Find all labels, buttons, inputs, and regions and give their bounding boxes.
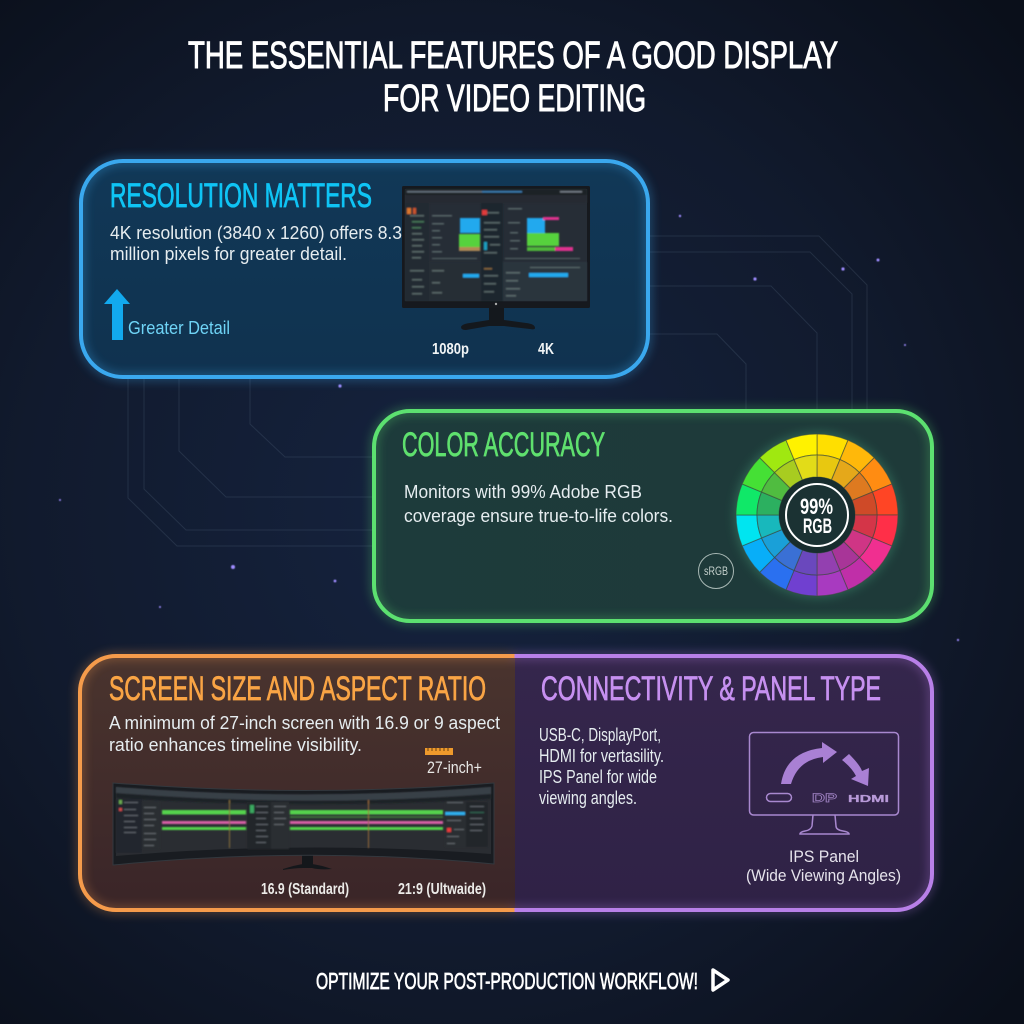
- chart: color wheel: [730, 428, 904, 602]
- monitor: 4K editing screen: [402, 186, 590, 330]
- icon: DP port: DP: [812, 791, 837, 805]
- label: 16:9 standard: 16.9 (Standard): [261, 881, 349, 898]
- label: 4K: 4K: [538, 341, 554, 358]
- label: IPS panel: [746, 847, 901, 885]
- title: FOR VIDEO EDITING: [383, 78, 646, 120]
- text: connectivity description: viewing angles.: [539, 788, 637, 808]
- label: IPS panel: IPS Panel: [789, 847, 859, 866]
- text: color description: coverage ensure true-to-life colors.: [404, 506, 673, 526]
- icon: monitor with ports: [750, 732, 898, 834]
- panel: resolution matters: [81, 161, 648, 377]
- icon: sRGB badge: sRGB: [704, 564, 728, 578]
- panel: color accuracy: [374, 411, 932, 621]
- arrow: curved right: [842, 754, 869, 786]
- text: screen size description: [109, 713, 500, 755]
- text: resolution description: million pixels for greater detail.: [110, 244, 347, 264]
- footer call to action: OPTIMIZE YOUR POST-PRODUCTION WORKFLOW!: [316, 968, 698, 994]
- text: connectivity description: HDMI for vertasility.: [539, 746, 664, 766]
- monitor: curved ultrawide: [113, 783, 494, 870]
- icon: play triangle: [713, 970, 728, 990]
- icon: sRGB badge: [698, 554, 734, 588]
- text: color description: [404, 482, 673, 526]
- text: connectivity description: USB-C, DisplayPort,: [539, 725, 661, 745]
- heading: resolution matters: RESOLUTION MATTERS: [110, 177, 372, 215]
- icon: USB-C port: [766, 794, 792, 802]
- title: [188, 35, 838, 120]
- text: color description: Monitors with 99% Adobe RGB: [404, 482, 642, 502]
- text: connectivity description: IPS Panel for wide: [539, 767, 657, 787]
- text: resolution description: [110, 223, 402, 264]
- label: IPS panel: (Wide Viewing Angles): [746, 866, 901, 885]
- text: screen size description: ratio enhances timeline visibility.: [109, 735, 362, 755]
- text: connectivity description: [539, 725, 664, 808]
- heading: screen size and aspect ratio: SCREEN SIZE AND ASPECT RATIO: [109, 670, 486, 708]
- icon: ruler: [425, 748, 453, 755]
- text: screen size description: A minimum of 27-inch screen with 16.9 or 9 aspect: [109, 713, 500, 733]
- arrow: curved left: [781, 742, 837, 784]
- label: greater detail: Greater Detail: [128, 318, 230, 338]
- heading: color accuracy: COLOR ACCURACY: [402, 426, 605, 464]
- chart: color wheel: 99%: [800, 494, 833, 519]
- text: resolution description: 4K resolution (3840 x 1260) offers 8.3: [110, 223, 402, 243]
- panel: screen size and connectivity: [80, 656, 932, 910]
- label: 21:9 ultrawide: 21:9 (Ultwaide): [398, 881, 486, 898]
- icon: up arrow: [104, 289, 130, 340]
- label: 1080p: 1080p: [432, 341, 469, 358]
- chart: color wheel: RGB: [803, 515, 832, 538]
- icon: HDMI port: HDMI: [848, 794, 889, 805]
- label: 27-inch: 27-inch+: [427, 758, 482, 777]
